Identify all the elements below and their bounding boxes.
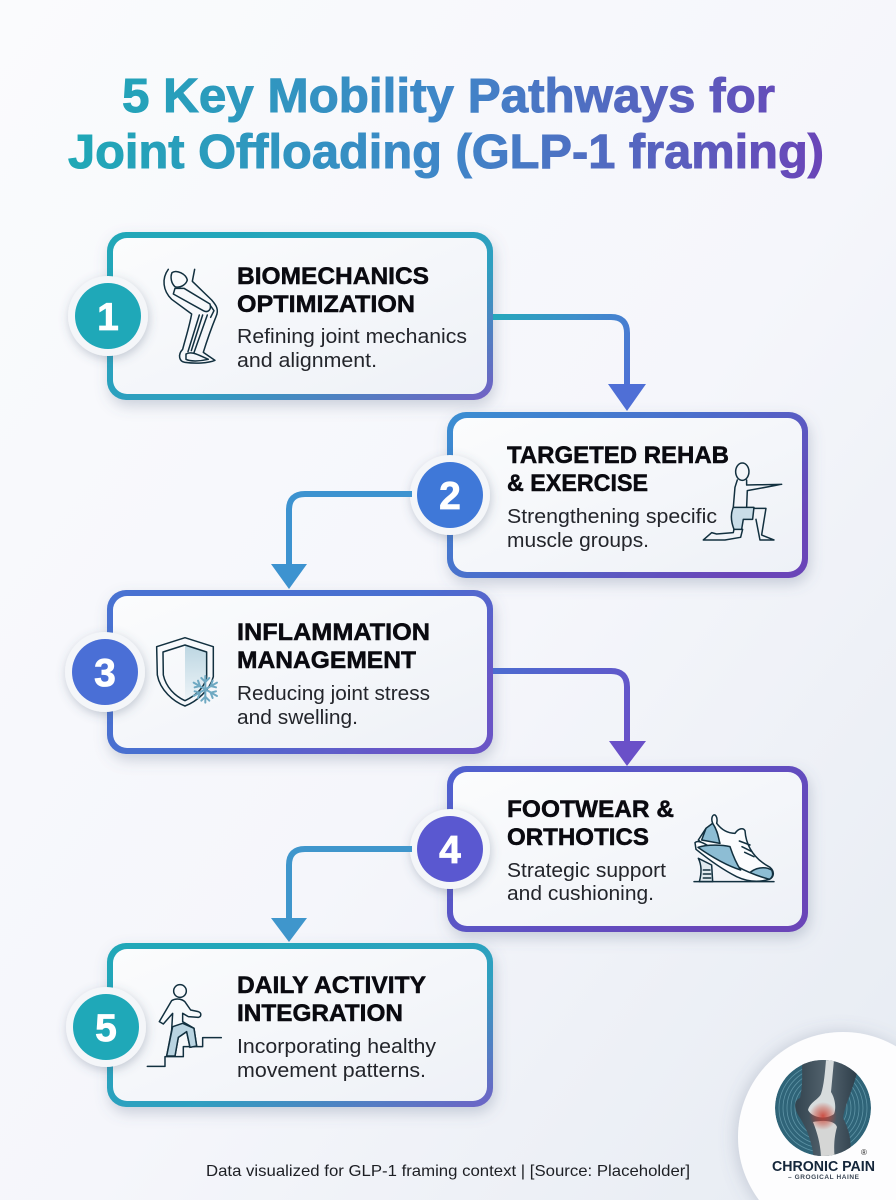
panel: step 5 daily activity integration: [66, 943, 493, 1107]
logo wordmark: CHRONIC PAIN: [772, 1159, 875, 1175]
step 4 description: and cushioning.: [507, 883, 654, 905]
step 3 heading: MANAGEMENT: [237, 647, 416, 674]
step 3 heading: INFLAMMATION: [237, 619, 430, 646]
badge 2: 2: [439, 475, 461, 518]
step 1 description: Refining joint mechanics: [237, 326, 467, 348]
step 1 heading: BIOMECHANICS: [237, 263, 429, 290]
title: 5 Key Mobility Pathways for: [122, 70, 775, 123]
step 2 heading: & EXERCISE: [507, 470, 648, 497]
badge 1: 1: [97, 296, 119, 339]
step 5 heading: [237, 972, 426, 1027]
step 4 heading: FOOTWEAR &: [507, 796, 674, 823]
step 1 description: [237, 326, 467, 372]
step 4 heading: [507, 796, 674, 851]
title: Joint Offloading (GLP-1 framing): [68, 126, 824, 179]
step 3 description: Reducing joint stress: [237, 683, 430, 705]
step 1 description: and alignment.: [237, 350, 377, 372]
step 5 description: movement patterns.: [237, 1060, 426, 1082]
arrow: step 2 to step 3: [271, 494, 412, 589]
step 3 description: and swelling.: [237, 707, 358, 729]
badge 1: [68, 276, 148, 356]
step 2 description: Strengthening specific: [507, 506, 717, 528]
icon: person climbing stairs: [147, 985, 221, 1066]
panel: step 2 targeted rehab and exercise: [410, 412, 808, 578]
badge 5: [66, 987, 146, 1067]
logo: chronic pain badge: [738, 1032, 896, 1200]
icon: running shoe with orthotic: [694, 815, 774, 882]
step 3 description: [237, 683, 430, 729]
badge 3: [65, 632, 145, 712]
logo tagline: – GROGICAL HAINE: [788, 1174, 860, 1181]
step 4 description: [507, 860, 666, 905]
logo knee illustration: [775, 1058, 871, 1160]
step 1 heading: OPTIMIZATION: [237, 291, 415, 318]
step 1 heading: [237, 263, 429, 318]
step 2 heading: [507, 442, 729, 497]
panel: step 4 footwear and orthotics: [410, 766, 808, 932]
arrow: step 4 to step 5: [271, 849, 412, 942]
step 5 heading: INTEGRATION: [237, 1000, 403, 1027]
badge 5: 5: [95, 1007, 117, 1050]
step 4 description: Strategic support: [507, 860, 666, 882]
step 2 description: muscle groups.: [507, 530, 649, 552]
step 2 heading: TARGETED REHAB: [507, 442, 729, 469]
step 4 heading: ORTHOTICS: [507, 824, 649, 851]
icon: leg skeleton: [164, 269, 217, 363]
icon: shield with snowflake: [157, 638, 217, 706]
icon: lunge exercise: [703, 463, 782, 540]
arrow: step 3 to step 4: [493, 671, 646, 766]
badge 2: [410, 455, 490, 535]
badge 3: 3: [94, 652, 116, 695]
footer source note: Data visualized for GLP-1 framing context | [Source: Placeholder]: [206, 1163, 690, 1180]
panel: step 1 biomechanics optimization: [68, 232, 493, 400]
step 3 heading: [237, 619, 430, 674]
title: [68, 70, 824, 179]
arrow: step 1 to step 2: [493, 317, 646, 411]
step 2 description: [507, 506, 717, 552]
step 5 heading: DAILY ACTIVITY: [237, 972, 426, 999]
badge 4: [410, 809, 490, 889]
panel: step 3 inflammation management: [65, 590, 493, 754]
step 5 description: Incorporating healthy: [237, 1036, 436, 1058]
logo registered mark: ®: [861, 1148, 867, 1157]
badge 4: 4: [439, 829, 461, 872]
step 5 description: [237, 1036, 436, 1082]
